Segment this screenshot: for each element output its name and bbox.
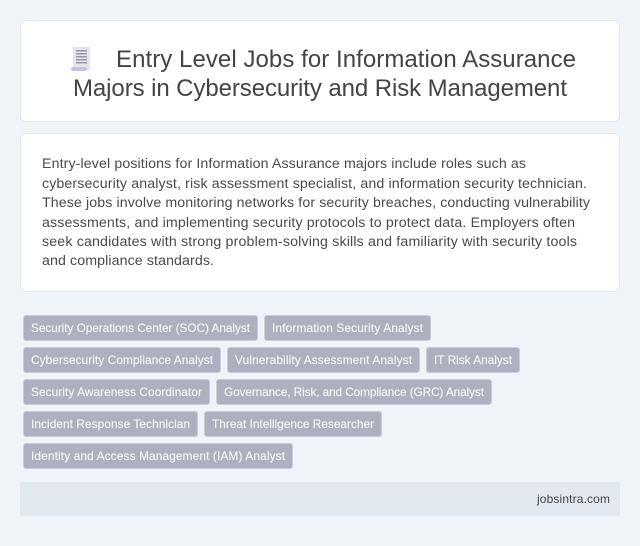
tag: Threat Intelligence Researcher — [212, 417, 374, 431]
text block: description: These jobs involve monitoring networks for security breaches, conducting vulnerability — [42, 195, 591, 211]
tag list: job titles — [24, 316, 520, 468]
tag: Security Operations Center (SOC) Analyst — [31, 321, 251, 335]
footer text: site name: jobsintra.com — [536, 492, 610, 506]
text block: description: assessments, and implementing security protocols to protect data. Employers often — [42, 215, 575, 231]
tag: Information Security Analyst — [272, 321, 424, 335]
footer — [20, 482, 620, 516]
tag: Security Awareness Coordinator — [31, 385, 202, 399]
tag — [204, 412, 382, 436]
tag: IT Risk Analyst — [434, 353, 513, 367]
text block: description: seek candidates with strong problem-solving skills and familiarity with security tools — [42, 234, 577, 250]
tag — [228, 348, 420, 372]
heading — [73, 46, 576, 102]
tag — [426, 348, 520, 372]
panel: title card — [20, 20, 620, 122]
tag — [264, 316, 430, 340]
tag — [24, 348, 220, 372]
panel: description — [20, 134, 620, 292]
heading: Majors in Cybersecurity and Risk Management — [73, 75, 567, 102]
text block: description: cybersecurity analyst, risk assessment specialist, and information security technician. — [42, 176, 587, 192]
text block: description: Entry-level positions for Information Assurance majors include roles such as — [42, 156, 526, 172]
text block: description: and compliance standards. — [42, 253, 214, 269]
tag — [24, 380, 210, 404]
heading: Entry Level Jobs for Information Assurance — [116, 46, 576, 73]
icon: scroll document — [71, 47, 90, 71]
tag — [24, 444, 292, 468]
tag: Vulnerability Assessment Analyst — [235, 353, 413, 367]
tag: Cybersecurity Compliance Analyst — [31, 353, 214, 367]
tag — [24, 412, 198, 436]
tag: Incident Response Technician — [31, 417, 190, 431]
text block: description — [42, 156, 591, 269]
tag: Identity and Access Management (IAM) Analyst — [31, 449, 286, 463]
tag: Governance, Risk, and Compliance (GRC) Analyst — [224, 385, 485, 399]
tag — [24, 316, 258, 340]
tag — [216, 380, 492, 404]
